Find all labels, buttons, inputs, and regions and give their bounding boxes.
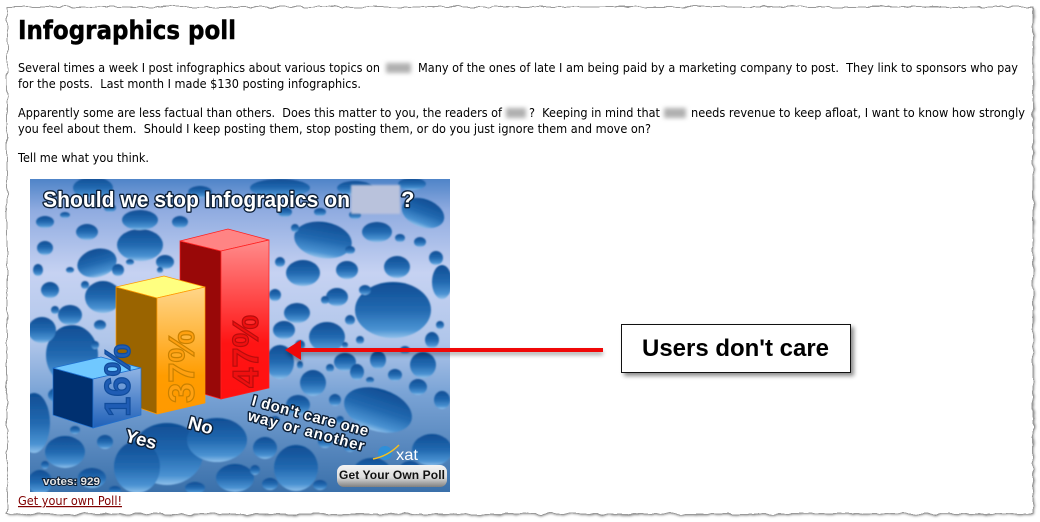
value label: 47%: 47% bbox=[225, 315, 266, 388]
poll image panel bbox=[18, 177, 452, 494]
water drops background bbox=[18, 177, 452, 494]
axis label: No: No bbox=[186, 413, 215, 438]
text block: second paragraph: Apparently some are less factual than others. Does this matter to you, the readers of bbox=[18, 106, 503, 120]
text block: second paragraph bbox=[18, 106, 1025, 136]
vote count: votes: 929 bbox=[43, 476, 100, 488]
text block: second paragraph: you feel about them. Should I keep posting them, stop posting them, or do you just ignore them and move on? bbox=[18, 122, 651, 136]
value label: 37%: 37% bbox=[161, 330, 202, 403]
text block: first paragraph: Several times a week I post infographics about various topics on bbox=[18, 61, 380, 75]
blurred site name bbox=[351, 185, 400, 214]
bar: red 47% bbox=[180, 229, 269, 399]
poll heading: Should we stop Infograpics on bbox=[43, 187, 350, 212]
text block: closing line: Tell me what you think. bbox=[17, 151, 149, 165]
icon: xat logo: xat bbox=[396, 447, 419, 464]
text block: first paragraph: for the posts. Last month I made $130 posting infographics. bbox=[18, 77, 361, 91]
icon: xat logo bbox=[372, 444, 418, 460]
button: Get Your Own Poll: Get Your Own Poll bbox=[339, 468, 445, 482]
poll heading question mark: ? bbox=[401, 187, 414, 212]
text block: first paragraph bbox=[18, 61, 1018, 91]
value label: 16%: 16% bbox=[97, 344, 138, 417]
text block: second paragraph: needs revenue to keep afloat, I want to know how strongly bbox=[691, 106, 1025, 120]
button: Get Your Own Poll bbox=[337, 465, 447, 487]
callout: Users don't care: Users don't care bbox=[642, 335, 829, 362]
axis label: I don't care one way or another: way or another bbox=[245, 407, 366, 455]
bar: blue 16% bbox=[53, 357, 141, 428]
text block: first paragraph: Many of the ones of late I am being paid by a marketing company to post. They link to sponsors who pay bbox=[418, 61, 1018, 75]
bar: orange 37% bbox=[116, 276, 205, 414]
arrow pointing at the 47% bar bbox=[285, 340, 603, 363]
axis label: Yes: Yes bbox=[123, 426, 159, 453]
link: Get your own Poll: Get your own Poll! bbox=[18, 494, 122, 508]
axis label: I don't care one way or another: I don't care one bbox=[250, 392, 370, 440]
title: Infographics poll bbox=[18, 16, 236, 46]
text block: second paragraph: ? Keeping in mind that bbox=[529, 106, 660, 120]
callout: Users don't care bbox=[622, 324, 854, 376]
